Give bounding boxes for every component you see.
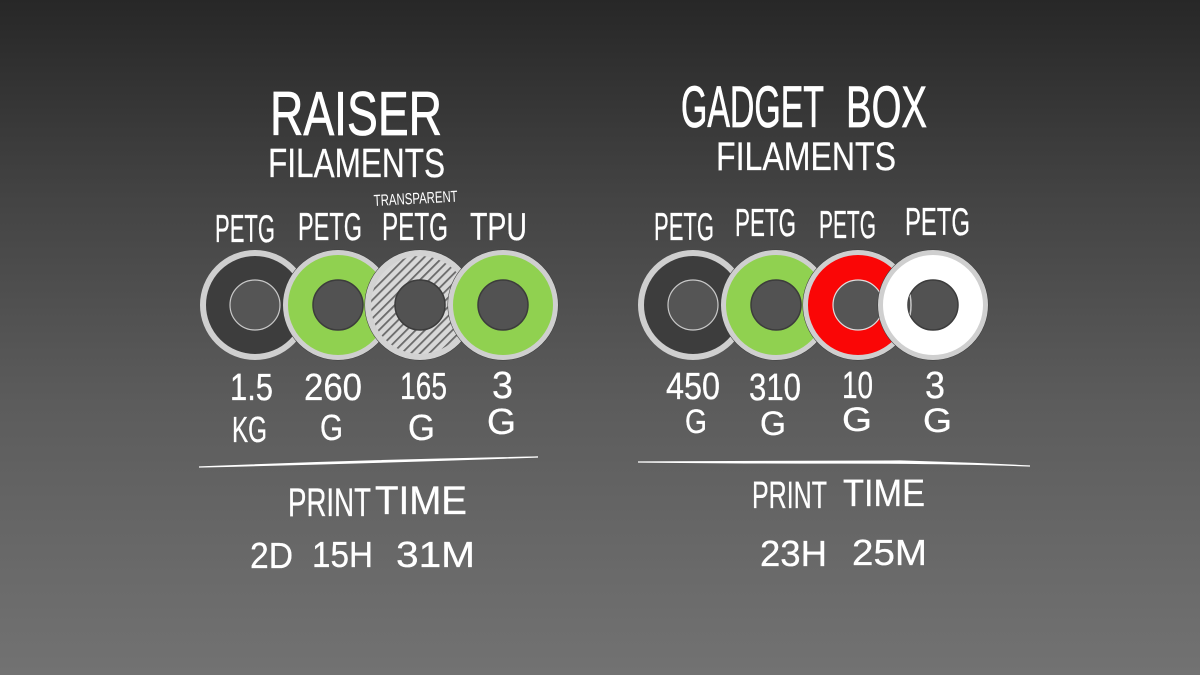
print time label: Gadget Box: TIME	[843, 473, 925, 515]
filament weights: KG	[232, 409, 267, 450]
filament type labels: PETG	[298, 206, 362, 249]
spool: white PETG	[878, 250, 988, 360]
print time label: Raiser: TIME	[375, 479, 467, 523]
subtitle: Gadget Box filaments: FILAMENTS	[716, 135, 896, 179]
filament weights: G	[320, 407, 343, 448]
filament type labels: PETG	[382, 206, 448, 249]
filament weights: 3	[925, 365, 945, 407]
filament weights: G	[408, 407, 435, 448]
title: Gadget Box: GADGET	[681, 75, 824, 140]
filament weights	[230, 365, 516, 450]
spool: black PETG	[641, 253, 745, 357]
filament type labels: PETG	[819, 204, 876, 247]
filament type labels: PETG	[215, 208, 275, 251]
filament weights: 450	[666, 366, 720, 408]
print time label: Raiser	[288, 479, 467, 525]
print time value: Raiser: 15H	[312, 534, 373, 575]
filament type labels: PETG	[905, 201, 970, 244]
note: transparent: TRANSPARENT	[373, 189, 458, 210]
filament weights: 1.5	[230, 367, 273, 409]
spool: green PETG	[720, 250, 832, 360]
title: Gadget Box: BOX	[846, 75, 927, 140]
filament type labels: PETG	[654, 206, 714, 249]
spool: green PETG	[282, 250, 394, 360]
subtitle: Raiser filaments: FILAMENTS	[268, 140, 445, 186]
filament weights: G	[760, 405, 786, 443]
print time label: Raiser: PRINT	[288, 481, 371, 525]
print time value: Gadget Box: 23H	[760, 533, 827, 574]
print time value: Raiser: 2D	[250, 535, 293, 576]
filament weights: 3	[492, 365, 513, 407]
print time value: Raiser	[250, 534, 475, 576]
print time label: Gadget Box: PRINT	[752, 475, 827, 517]
filament weights: 310	[749, 367, 801, 409]
print time value: Gadget Box: 25M	[852, 532, 927, 573]
filament weights	[666, 365, 952, 443]
filament type labels	[654, 201, 970, 249]
title: Raiser: RAISER	[270, 80, 442, 149]
filament weights: G	[685, 403, 707, 441]
print time label: Gadget Box	[752, 473, 925, 517]
filament weights: 260	[304, 367, 362, 409]
spool: transparent PETG	[364, 250, 476, 360]
spool: black PETG	[203, 253, 307, 357]
filament weights: 10	[842, 365, 873, 407]
panel: Gadget Box filaments	[638, 75, 1030, 574]
spool: green TPU	[448, 250, 558, 360]
panel: Raiser filaments	[199, 80, 558, 576]
filament type labels: PETG	[735, 202, 796, 245]
filament type labels	[215, 206, 527, 251]
filament weights: 165	[400, 366, 447, 408]
print time value: Gadget Box	[760, 532, 927, 574]
filament weights: G	[487, 401, 516, 442]
filament spools	[203, 250, 558, 360]
filament spools	[641, 250, 988, 360]
spool: red PETG	[802, 250, 914, 360]
filament type labels: TPU	[470, 206, 527, 249]
filament weights: G	[842, 401, 872, 439]
filament weights: G	[923, 402, 952, 440]
print time value: Raiser: 31M	[396, 534, 475, 575]
